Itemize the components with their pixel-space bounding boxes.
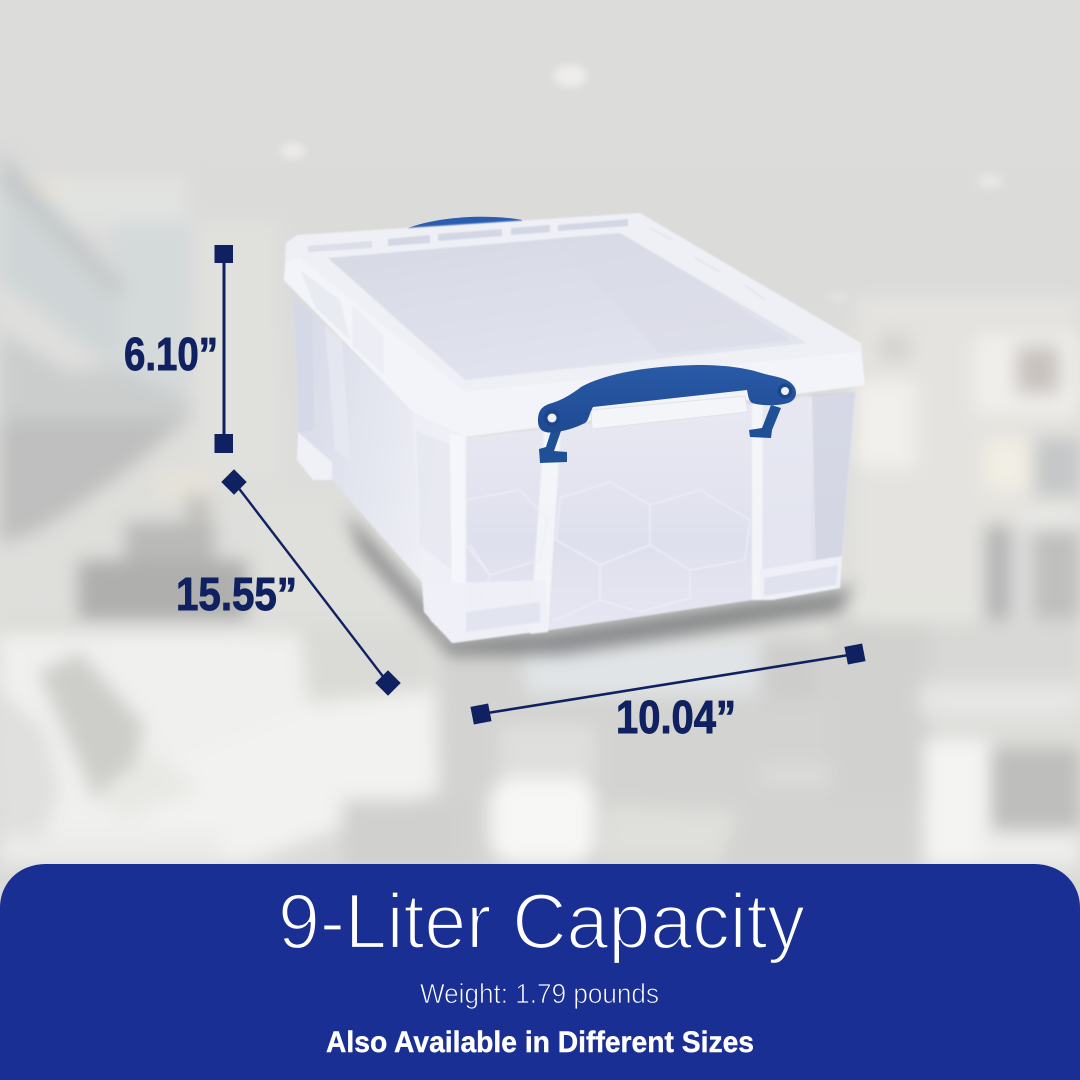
label: length: 15.55”: [176, 568, 297, 620]
dimension: height: [124, 245, 233, 453]
side panel: [293, 295, 465, 643]
handle back: [408, 217, 522, 232]
front panel: [453, 392, 855, 643]
lid rim slots: [308, 241, 372, 252]
handle: [538, 365, 796, 463]
sofa: [0, 634, 310, 860]
label: height: 6.10”: [124, 328, 218, 380]
box body: [293, 295, 855, 643]
heading: 9-Liter Capacity: [278, 877, 805, 965]
bottom panel: [0, 864, 1080, 1080]
clip: right: [749, 405, 781, 438]
lid inner panel: [328, 233, 807, 380]
right wall: [855, 320, 1080, 620]
sizes note: Also Available in Different Sizes: [326, 1026, 754, 1059]
dimension: length: [176, 469, 401, 696]
lid: [284, 213, 865, 437]
weight text: Weight: 1.79 pounds: [420, 978, 659, 1009]
clip: left: [539, 428, 567, 463]
right foot: [760, 556, 842, 600]
box shadow: [345, 510, 855, 655]
hexagon floor pattern: [466, 482, 750, 620]
stair window: [20, 177, 187, 225]
label: width: 10.04”: [616, 691, 736, 743]
dimension: width: [470, 643, 866, 743]
front ribs: [412, 413, 465, 643]
icon: storage box product: [284, 213, 865, 655]
right darker strip: [812, 392, 855, 574]
rivets: [544, 410, 560, 426]
floor: [440, 640, 920, 870]
label strip: [591, 396, 748, 429]
front foot: [424, 580, 548, 643]
handle grip: [538, 365, 796, 433]
